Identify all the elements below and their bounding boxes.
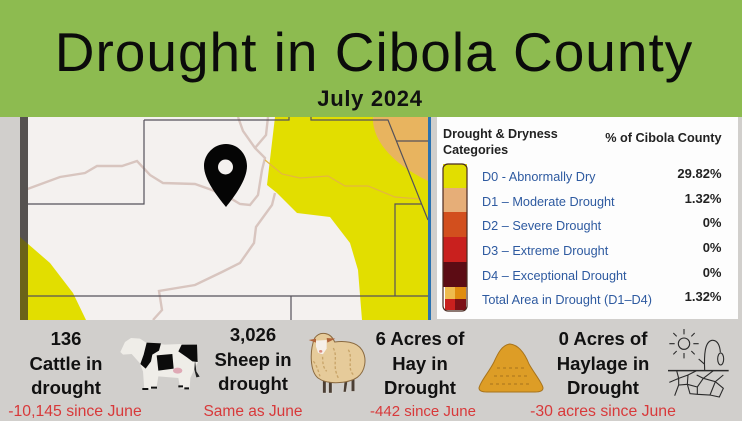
stat: sheep: drought — [218, 373, 288, 394]
legend colour scale — [442, 163, 468, 312]
value: D2: 0% — [703, 215, 722, 230]
icon: location pin — [204, 144, 247, 207]
legend row: D2: D2 – Severe Drought — [482, 219, 601, 233]
value: total: 1.32% — [685, 289, 722, 304]
stat: haylage: Haylage in — [557, 352, 649, 374]
stat: sheep — [214, 324, 292, 394]
change: cattle: -10,145 since June — [8, 403, 142, 420]
stat: hay: Hay in — [392, 352, 448, 374]
subtitle: July 2024 — [317, 86, 423, 111]
legend column heading: % of Cibola County — [605, 131, 722, 145]
value: D3: 0% — [703, 240, 722, 255]
change: sheep: Same as June — [203, 403, 303, 420]
icon: sun, wilted plant and cracked earth — [668, 329, 729, 398]
icon: hay bale — [478, 344, 544, 392]
stat: hay: Drought — [384, 377, 456, 398]
stat: haylage — [557, 328, 649, 398]
map: abnormally dry area east — [267, 117, 428, 320]
change: haylage: -30 acres since June — [530, 403, 676, 420]
map: stream through dry area — [265, 160, 420, 199]
stat: cattle: 136 — [51, 328, 81, 349]
legend row: D3: D3 – Extreme Drought — [482, 244, 608, 258]
map: right edge strip — [428, 117, 431, 320]
stat: haylage: 0 Acres of — [559, 328, 647, 349]
stat: sheep: 3,026 — [230, 324, 276, 345]
value: D0: 29.82% — [677, 166, 722, 181]
legend headings — [443, 127, 558, 156]
map: roads — [22, 117, 275, 320]
icon: cow — [120, 338, 200, 390]
drought map — [20, 117, 431, 320]
map: left edge strip — [20, 117, 28, 320]
icon: sheep — [308, 332, 366, 394]
map: county boundaries — [28, 117, 428, 320]
stat: cattle: Cattle in — [30, 352, 102, 374]
stat: haylage: Drought — [567, 377, 639, 398]
header banner — [0, 0, 742, 117]
legend row: D1: D1 – Moderate Drought — [482, 195, 615, 209]
stat: cattle: drought — [31, 377, 101, 398]
map: moderate drought area — [373, 117, 428, 181]
stat: hay: 6 Acres of — [376, 328, 464, 349]
legend headings: Drought & Dryness — [443, 127, 558, 141]
value: D4: 0% — [703, 265, 722, 280]
legend row: D0: D0 - Abnormally Dry — [482, 170, 596, 184]
value: D1: 1.32% — [685, 191, 722, 206]
map: abnormally dry area southwest — [20, 237, 86, 320]
legend panel — [437, 117, 738, 319]
legend row: D4: D4 – Exceptional Drought — [482, 269, 627, 283]
stat: cattle — [30, 328, 102, 398]
stat: sheep: Sheep in — [214, 348, 292, 370]
title: Drought in Cibola County — [55, 21, 693, 83]
change: hay: -442 since June — [370, 403, 476, 420]
legend row: total: Total Area in Drought (D1–D4) — [482, 293, 652, 307]
stat: hay — [376, 328, 464, 398]
legend headings: Categories — [443, 142, 508, 156]
